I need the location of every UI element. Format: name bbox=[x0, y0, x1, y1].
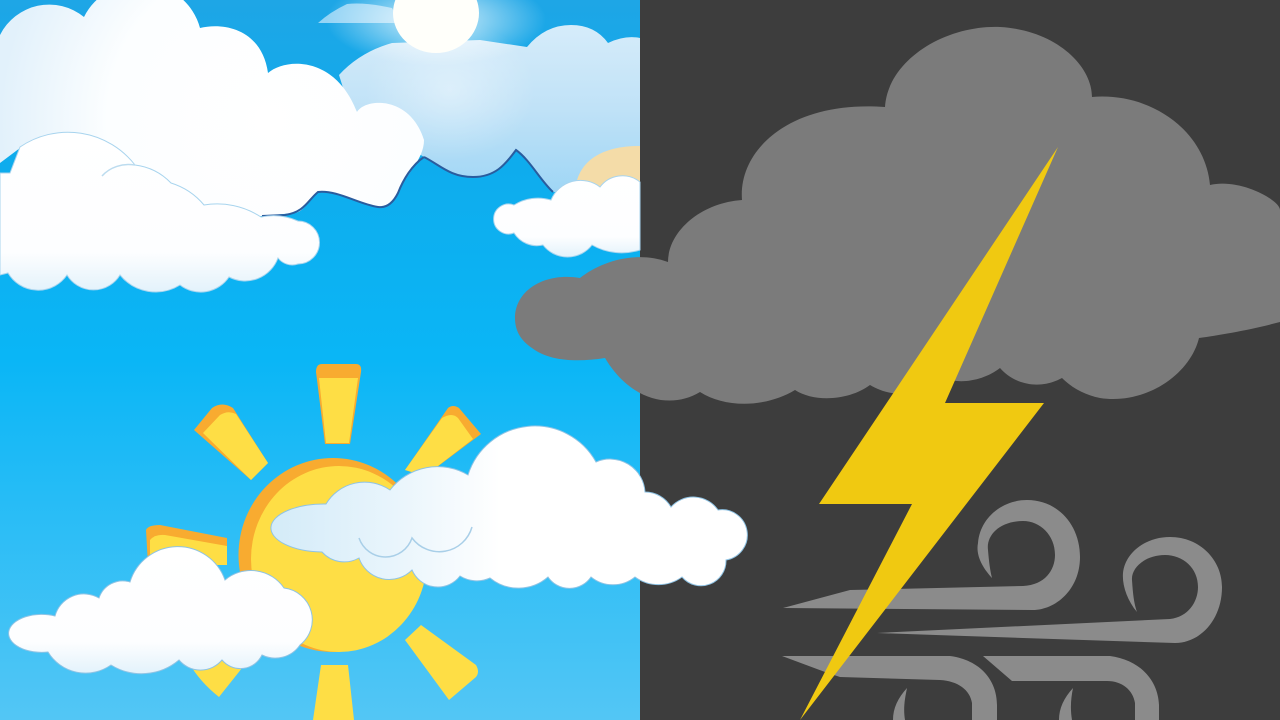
icon: top ray bbox=[316, 364, 361, 444]
icon: bottom ray bbox=[313, 665, 354, 720]
icon: cloud in front of sun bbox=[271, 426, 747, 588]
icon: distant cloud bank bbox=[339, 25, 640, 192]
icon: wind gusts bbox=[782, 500, 1222, 720]
icon: curl tips bbox=[893, 688, 1073, 720]
icon: lower right ray bbox=[405, 625, 478, 700]
icon: lightning bolt bbox=[800, 147, 1058, 720]
icon: left middle cloud bbox=[0, 132, 320, 292]
icon: upper gust bbox=[783, 500, 1080, 610]
icon: distant sun with glow bbox=[326, 0, 546, 160]
icon: upper right ray bbox=[405, 406, 481, 476]
icon: lower left gust bbox=[782, 656, 997, 720]
icon: distant wisp cloud bbox=[318, 4, 400, 23]
icon: left ray bbox=[146, 525, 227, 565]
icon: sun with rays bbox=[146, 364, 481, 720]
icon: middle gust bbox=[877, 537, 1222, 643]
icon: small sun behind cloud bbox=[575, 146, 640, 190]
icon: sun disc rim bbox=[238, 458, 428, 652]
icon: lower right gust bbox=[983, 656, 1159, 720]
panel: sunny sky bbox=[0, 0, 640, 720]
icon: large upper cloud bbox=[0, 0, 424, 220]
icon: lower left cloud bbox=[9, 547, 312, 674]
icon: upper left ray bbox=[194, 404, 268, 480]
icon: cloud inner line bbox=[102, 164, 135, 176]
icon: storm cloud bbox=[515, 27, 1280, 404]
icon: sun disc bbox=[251, 466, 427, 652]
panel: stormy sky bbox=[640, 0, 1280, 720]
icon: upper cloud edge line bbox=[262, 157, 424, 216]
icon: front cloud inner line bbox=[359, 527, 472, 557]
icon: far cloud edge line bbox=[424, 150, 553, 192]
icon: lower left ray bbox=[189, 658, 250, 697]
icon: right small cloud bbox=[494, 176, 640, 257]
